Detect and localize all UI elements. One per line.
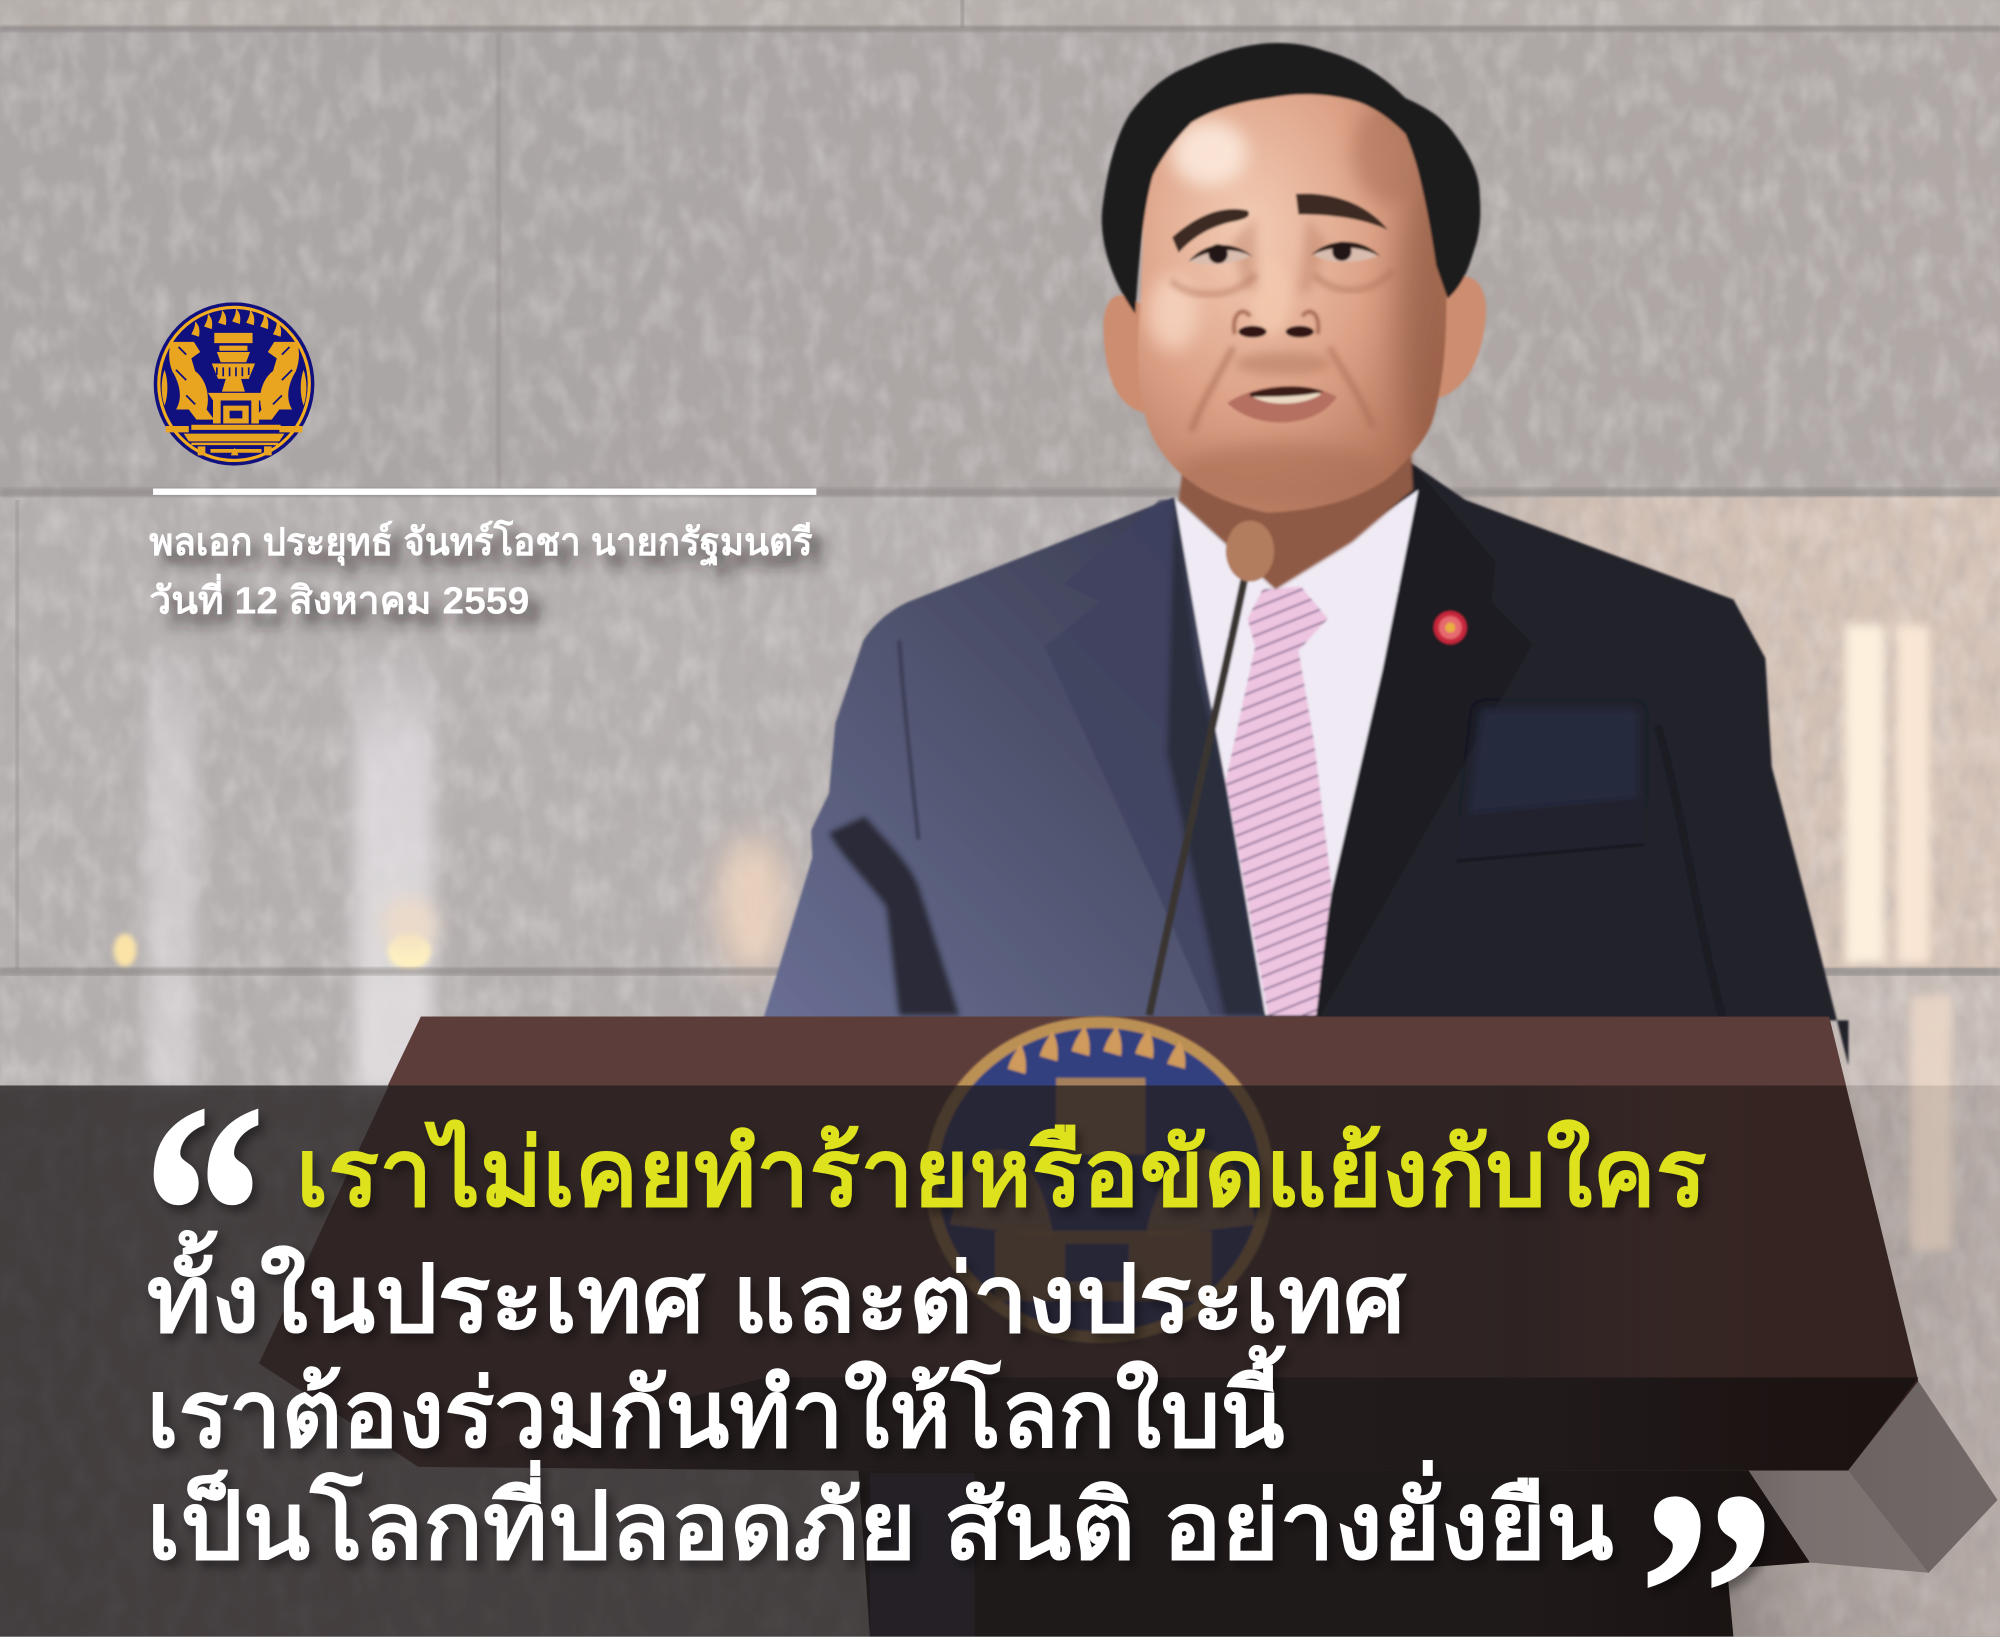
- podium side block: [1749, 1381, 1997, 1573]
- shirt and tie: [1175, 490, 1418, 1015]
- neck: [1179, 421, 1413, 589]
- opening quote mark: “: [143, 1041, 265, 1384]
- hair: [1102, 43, 1480, 314]
- left lion: [166, 342, 214, 432]
- microphone: [1149, 520, 1274, 1015]
- line 4: เป็นโลกที่ปลอดภัย สันติ อย่างยั่งยืน: [147, 1460, 1614, 1580]
- eyebrows: [1172, 209, 1249, 253]
- date: วันที่ 12 สิงหาคม 2559: [149, 574, 529, 623]
- table and base: [184, 401, 284, 455]
- lapel pin: [1434, 611, 1467, 644]
- nose: [1239, 326, 1267, 337]
- podium emblem: [925, 1017, 1274, 1343]
- closing quote mark: ,,: [1645, 1281, 1773, 1605]
- quote text: [143, 1041, 1773, 1605]
- highlighted line: เราไม่เคยทำร้ายหรือขัดแย้งกับใคร: [296, 1119, 1707, 1226]
- right lion: [254, 342, 302, 432]
- podium front: [259, 1017, 1918, 1471]
- podium: [259, 1017, 1997, 1636]
- podium top strip: [388, 1017, 1846, 1085]
- eyes: [1189, 247, 1250, 264]
- icon: government emblem: [154, 302, 314, 466]
- suit jacket: [763, 462, 1848, 1065]
- podium base: [858, 1471, 1810, 1636]
- mouth: [1227, 386, 1337, 422]
- speaker name: พลเอก ประยุทธ์ จันทร์โอชา นายกรัฐมนตรี: [149, 519, 813, 567]
- dark caption band: [0, 1085, 2000, 1636]
- divider rule: [153, 489, 816, 495]
- face: [1138, 77, 1464, 513]
- line 3: เราต้องร่วมกันทำให้โลกใบนี้: [147, 1344, 1286, 1467]
- ears: [1103, 276, 1486, 413]
- line 2: ทั้งในประเทศ และต่างประเทศ: [147, 1230, 1408, 1353]
- urn: [208, 333, 265, 401]
- person: prime minister at podium: [763, 43, 1848, 1065]
- speaker credit: [149, 519, 813, 623]
- flames: [191, 309, 281, 337]
